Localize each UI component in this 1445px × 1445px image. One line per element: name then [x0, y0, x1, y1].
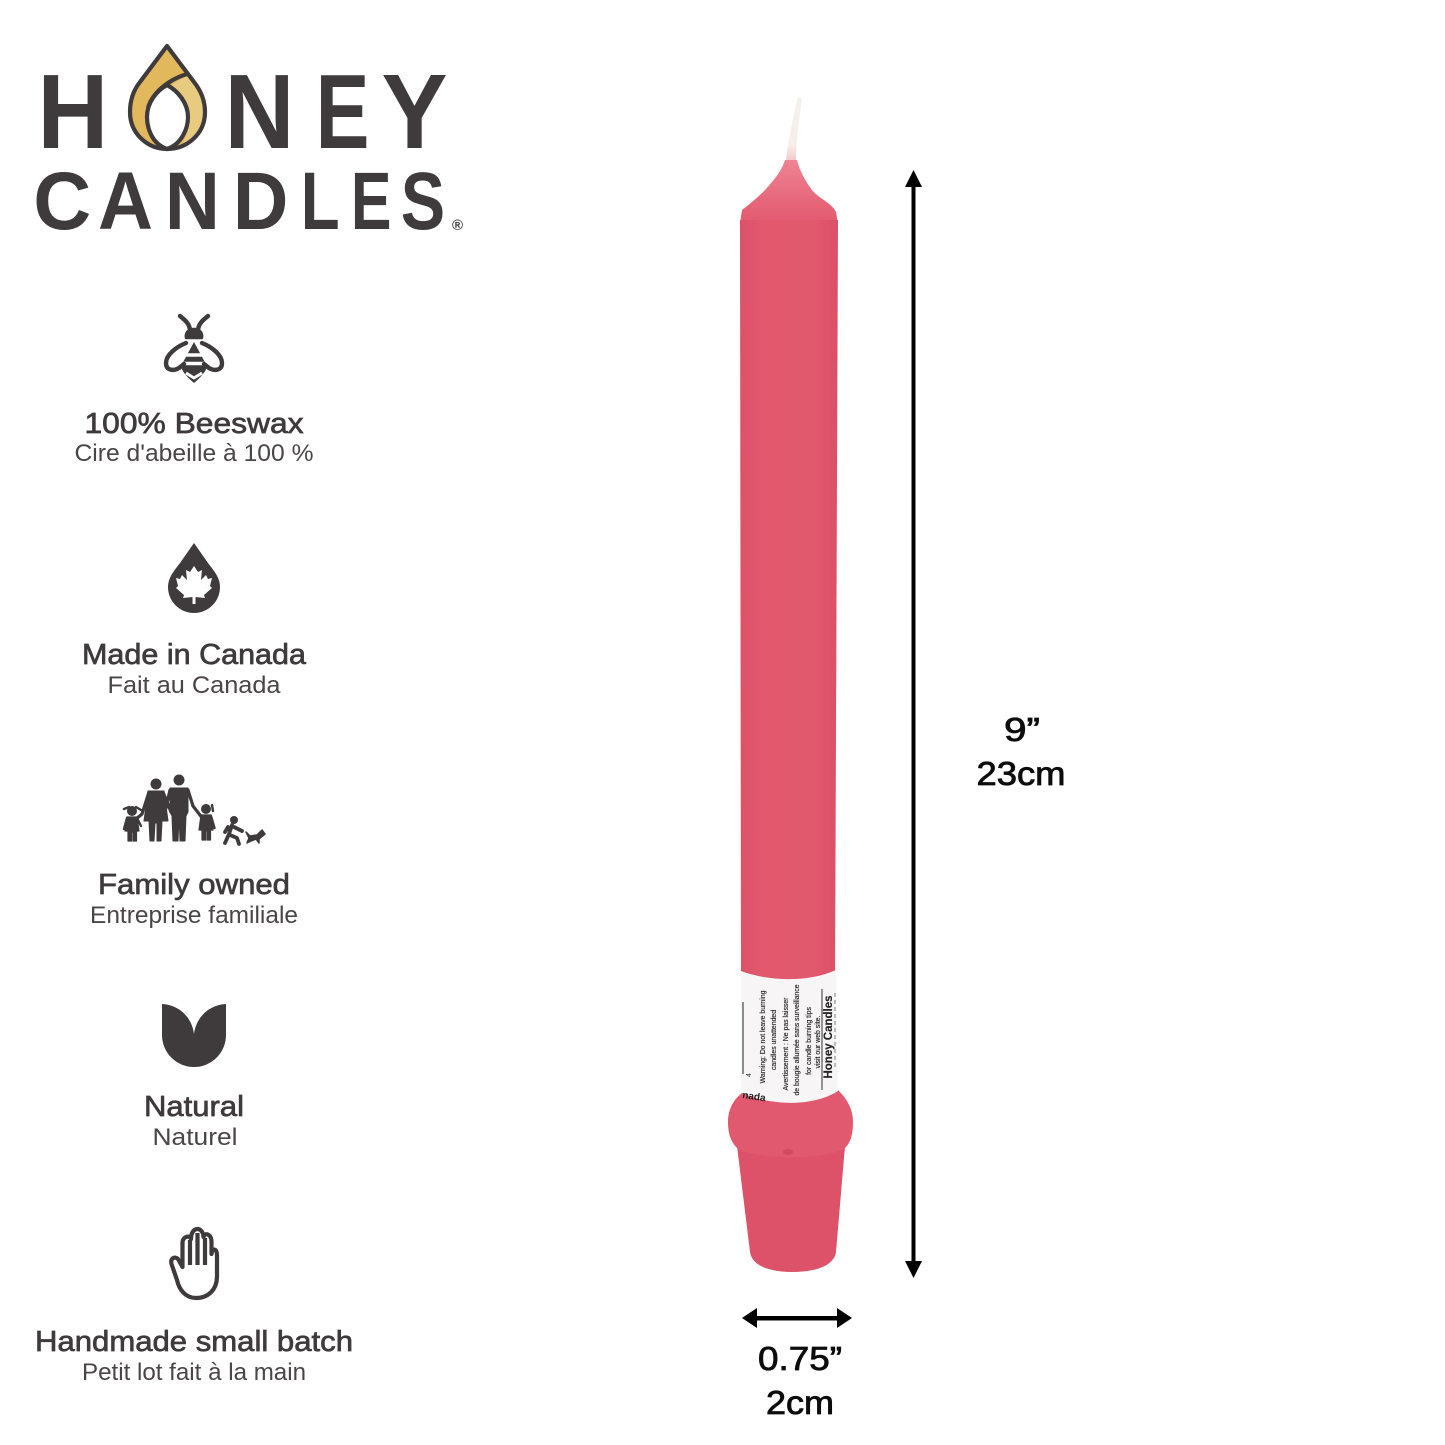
logo wordmark: HONEY: [37, 53, 448, 171]
logo wordmark: CANDLES: E: [351, 156, 392, 247]
feature: Made in Canada: [82, 543, 307, 699]
icon: drop with maple leaf: [168, 543, 220, 613]
registered mark: ®: [452, 217, 463, 234]
collar: [728, 1090, 853, 1157]
logo wordmark: HONEY: E: [316, 53, 369, 171]
label: candles unattended: [771, 1010, 778, 1070]
feature: 100% Beeswax: [74, 316, 314, 467]
candle: [728, 97, 853, 1272]
wick: [786, 97, 802, 161]
label: [741, 970, 838, 1104]
icon: family with dog: [124, 774, 265, 844]
collar bump: [783, 1149, 793, 1155]
icon: leaf: [162, 1004, 226, 1067]
logo flame icon: [130, 46, 205, 149]
height label: 9”: [1004, 711, 1040, 748]
collar foot: [737, 1146, 845, 1272]
width label: [758, 1340, 842, 1421]
label: Warning: Do not leave burning: [760, 990, 767, 1083]
height label: [976, 711, 1066, 792]
heading: Natural: [144, 1091, 244, 1123]
logo wordmark: HONEY: N: [224, 53, 294, 171]
heading: Handmade small batch: [35, 1326, 353, 1358]
logo wordmark: CANDLES: A: [98, 156, 153, 247]
heading: 100% Beeswax: [84, 408, 304, 440]
heading: Made in Canada: [82, 639, 307, 671]
feature: Handmade small batch: [35, 1229, 353, 1386]
label: visit our web site.: [815, 1015, 822, 1068]
subheading: Petit lot fait à la main: [82, 1359, 306, 1386]
label: nada: [742, 1090, 767, 1104]
subheading: Entreprise familiale: [90, 902, 298, 929]
height label: 23cm: [976, 755, 1066, 792]
candle tip: [740, 160, 838, 224]
logo wordmark: CANDLES: S: [401, 156, 445, 247]
arrow: width dimension: [742, 1308, 852, 1328]
logo: Honey Candles: [33, 46, 463, 247]
label: 4: [746, 1073, 753, 1077]
logo wordmark: HONEY: H: [37, 53, 108, 171]
logo wordmark: CANDLES: C: [33, 156, 91, 247]
candle body: [740, 220, 838, 985]
feature: Natural: [144, 1004, 244, 1151]
subheading: Fait au Canada: [108, 672, 281, 699]
arrow: height dimension: [905, 170, 922, 1278]
subheading: Naturel: [152, 1124, 238, 1151]
label: de bougie allumée sans surveillance: [794, 984, 801, 1096]
label: for candle burning tips: [806, 1007, 813, 1075]
label: Honey Candles: [823, 995, 835, 1079]
logo wordmark: CANDLES: [33, 156, 445, 247]
logo wordmark: CANDLES: D: [233, 156, 288, 247]
width label: 2cm: [766, 1384, 834, 1421]
icon: hand: [171, 1229, 217, 1298]
logo wordmark: CANDLES: L: [301, 156, 340, 247]
logo wordmark: CANDLES: N: [165, 156, 220, 247]
feature: Family owned: [90, 774, 298, 929]
label: Avertissement : Ne pas laisser: [783, 997, 790, 1090]
icon: bee: [166, 316, 222, 383]
heading: Family owned: [98, 869, 290, 901]
logo wordmark: HONEY: Y: [382, 53, 448, 171]
width label: 0.75”: [758, 1340, 842, 1377]
subheading: Cire d'abeille à 100 %: [74, 440, 314, 467]
